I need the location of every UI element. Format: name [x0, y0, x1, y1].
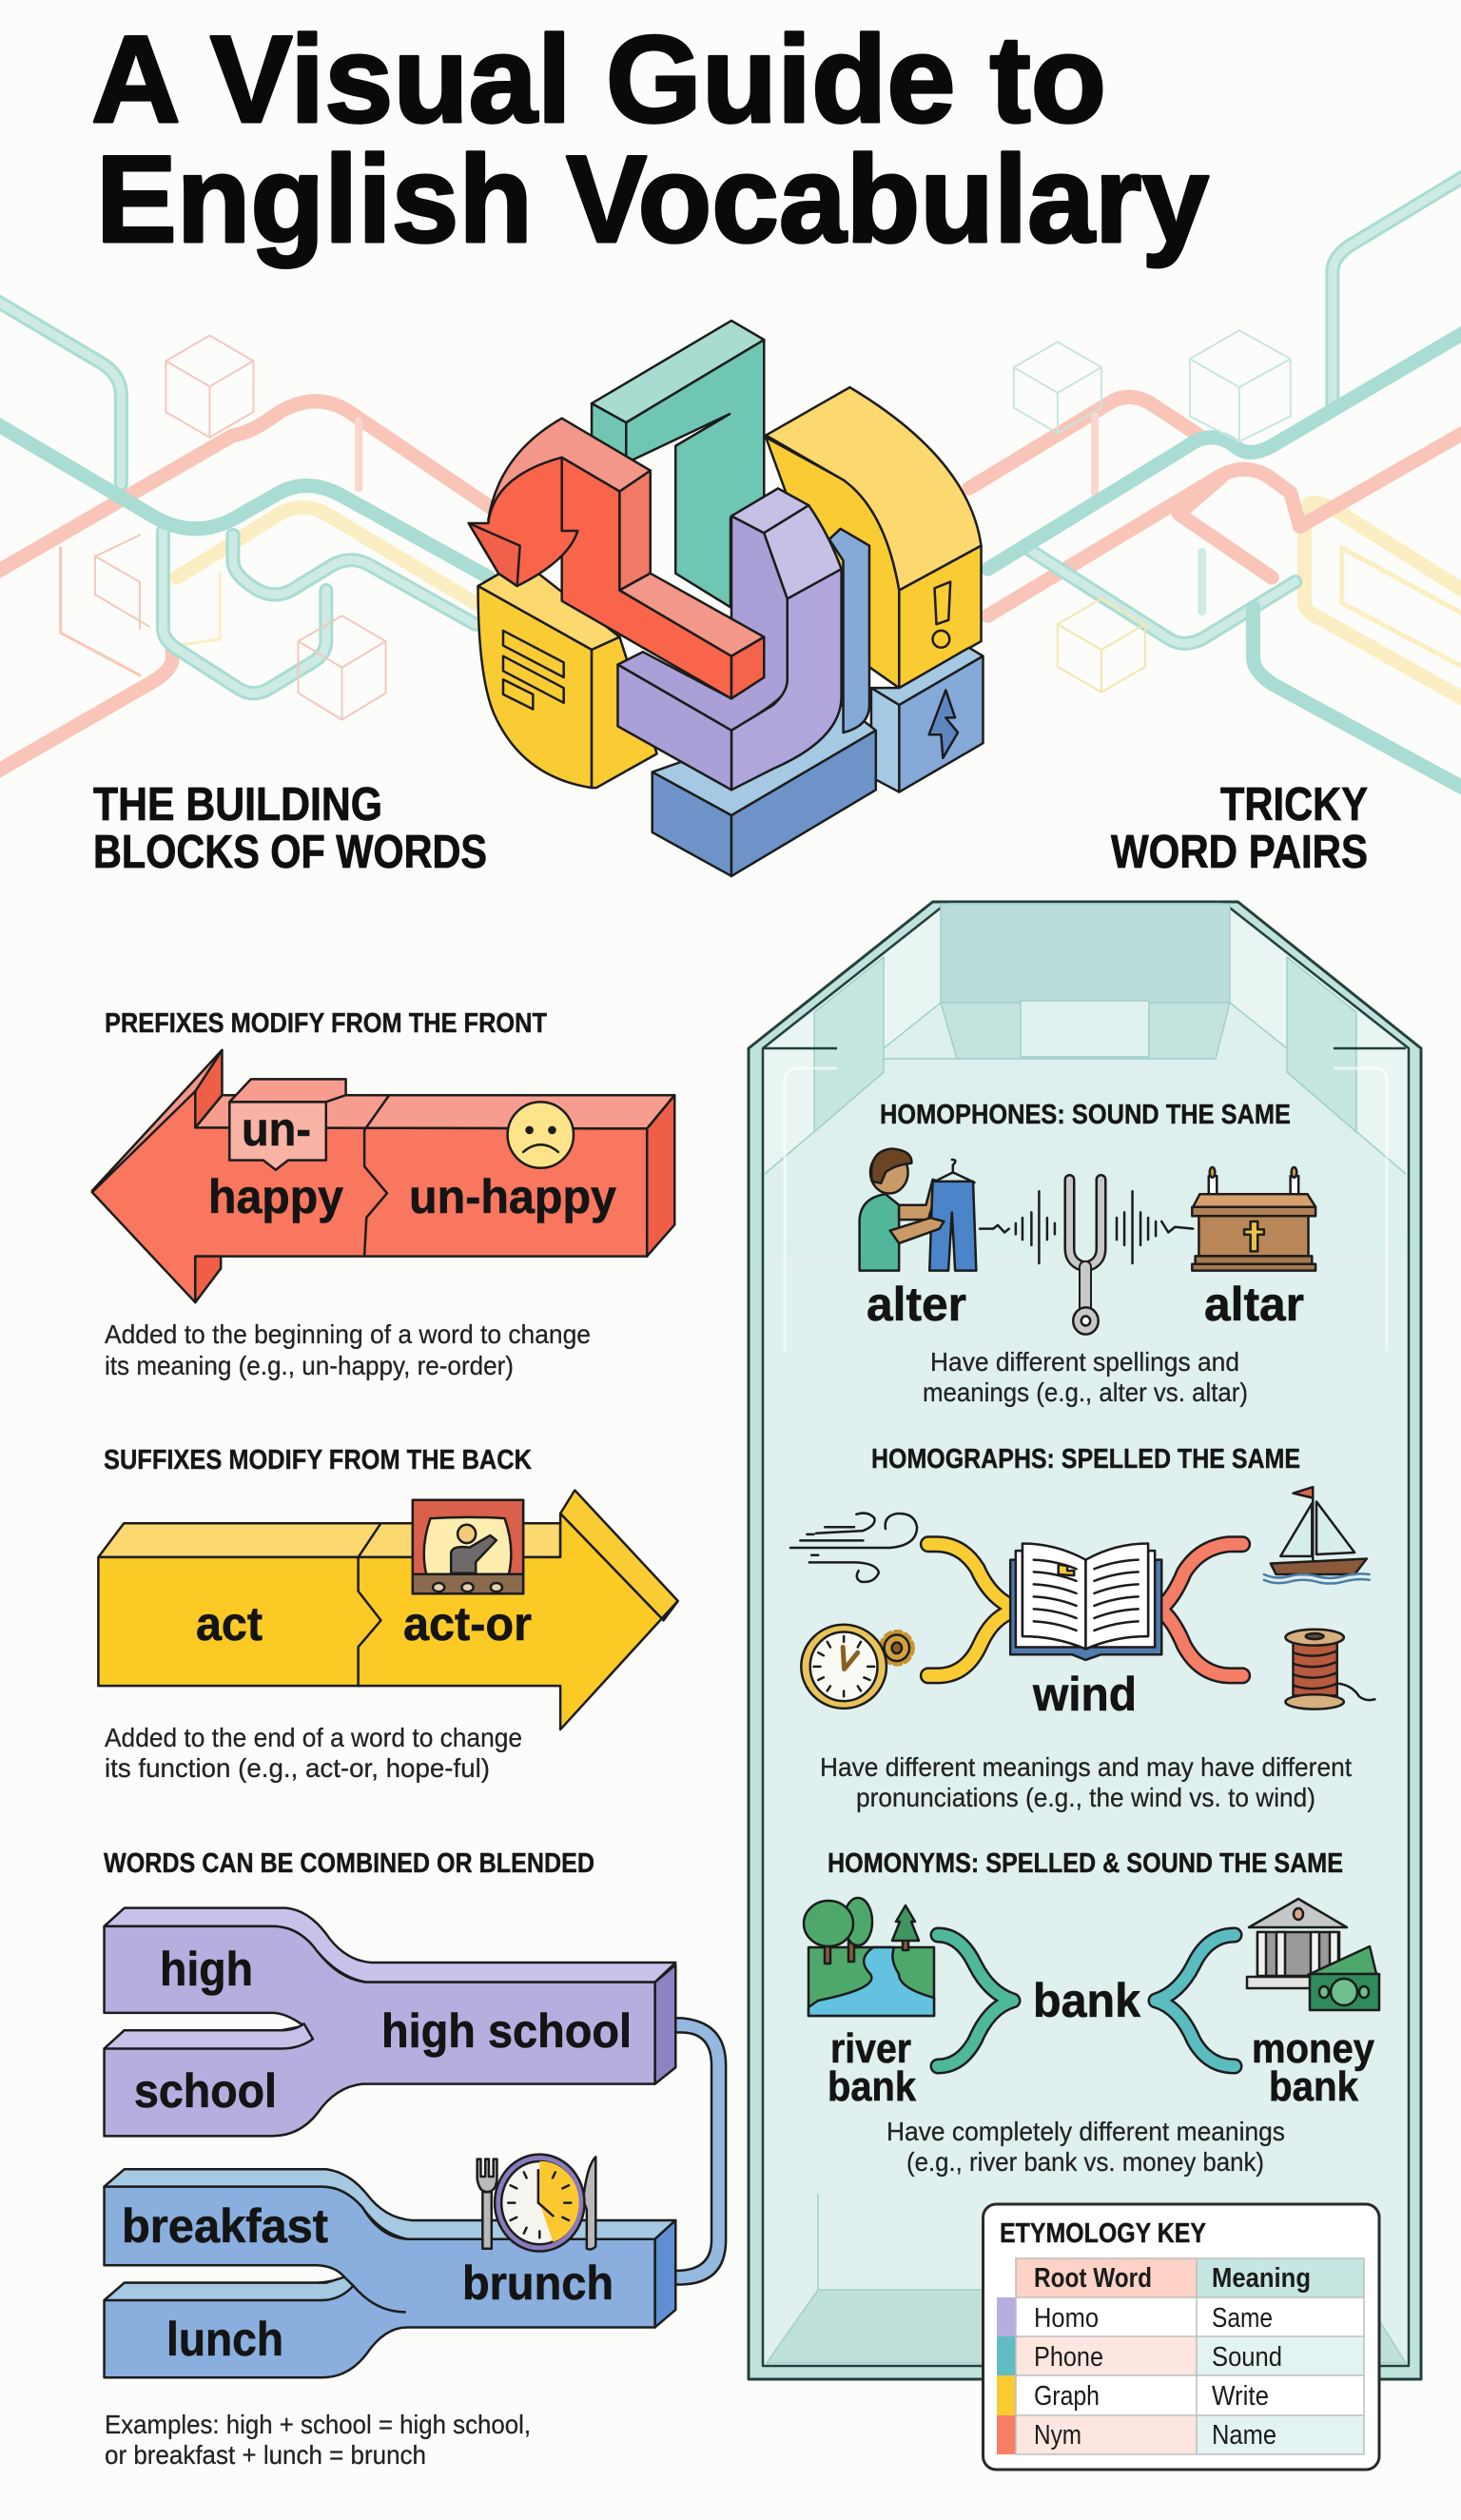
homonyms description: Have completely different meanings — [886, 2117, 1285, 2146]
homophones heading: HOMOPHONES: SOUND THE SAME — [880, 1100, 1291, 1130]
homophones description: meanings (e.g., alter vs. altar) — [923, 1377, 1248, 1407]
compound and blend labels: brunch — [462, 2256, 614, 2310]
prefix description: Added to the beginning of a word to change — [105, 1319, 591, 1349]
suffix arrow labels — [196, 1597, 532, 1651]
homonyms words — [828, 1974, 1374, 2110]
icon: tuning fork — [1069, 1180, 1101, 1335]
red arrow block — [469, 419, 764, 698]
title: A Visual Guide to — [91, 10, 1106, 148]
homophones description: Have different spellings and — [930, 1347, 1239, 1377]
compound and blend labels: school — [134, 2064, 277, 2118]
teal arch block — [592, 321, 764, 607]
suffix arrow labels: act — [196, 1597, 263, 1651]
prefix arrow labels: un-happy — [409, 1170, 616, 1223]
suffix arrow: yellow — [98, 1491, 678, 1729]
suffix description: its function (e.g., act-or, hope-ful) — [105, 1753, 490, 1783]
homographs word: wind — [1032, 1668, 1137, 1721]
table: root words and meanings: Graph — [1034, 2381, 1100, 2412]
compound and blend labels — [122, 1943, 632, 2366]
prefix arrow labels — [208, 1103, 616, 1223]
table: root words and meanings: Root Word — [1034, 2263, 1152, 2294]
blue block with lightning icon — [871, 648, 983, 792]
table: root words and meanings — [997, 2258, 1364, 2454]
table: root words and meanings: Meaning — [1212, 2263, 1311, 2294]
icon: thread spool — [1285, 1630, 1374, 1709]
icon: wind — [790, 1514, 917, 1582]
icon: bank building with money — [1247, 1899, 1379, 2010]
prefix arrow labels: un- — [242, 1103, 311, 1156]
compound and blend labels: lunch — [166, 2313, 283, 2366]
central isometric word blocks illustration — [469, 321, 983, 876]
homonyms description: (e.g., river bank vs. money bank) — [906, 2147, 1264, 2177]
yellow arch block with exclamation icon — [766, 387, 982, 688]
icon: open book — [1010, 1543, 1161, 1660]
homonyms words: bank — [1269, 2063, 1358, 2110]
compounds heading: WORDS CAN BE COMBINED OR BLENDED — [104, 1848, 594, 1879]
connector pipe — [664, 2018, 726, 2284]
prefix description: its meaning (e.g., un-happy, re-order) — [105, 1351, 514, 1380]
section heading: tricky word pairs: TRICKY — [1220, 779, 1368, 830]
homographs description: pronunciations (e.g., the wind vs. to wind) — [856, 1783, 1315, 1812]
homographs diagram — [790, 1487, 1374, 1709]
icon: sad face — [508, 1102, 574, 1168]
red connectors — [1164, 1544, 1242, 1675]
homographs description — [820, 1752, 1352, 1812]
homonyms words: bank — [1033, 1974, 1140, 2027]
homonyms words: money — [1252, 2025, 1374, 2072]
compounds description: or breakfast + lunch = brunch — [105, 2440, 426, 2470]
suffix description: Added to the end of a word to change — [105, 1723, 522, 1752]
homophones words: altar — [1204, 1278, 1304, 1331]
homonyms description — [886, 2117, 1285, 2177]
icon: clock plate with cutlery — [477, 2155, 595, 2252]
icon: river landscape — [804, 1898, 934, 2016]
prefix arrow: red — [92, 1050, 674, 1302]
blue blend shape — [105, 2169, 675, 2377]
icon: altar — [1192, 1167, 1315, 1271]
table: root words and meanings: Write — [1212, 2381, 1269, 2412]
suffixes heading: SUFFIXES MODIFY FROM THE BACK — [104, 1445, 532, 1475]
purple J block — [617, 488, 842, 790]
suffix description — [105, 1723, 522, 1783]
glass floor — [767, 2194, 1406, 2363]
homonyms heading: HOMONYMS: SPELLED & SOUND THE SAME — [828, 1848, 1343, 1879]
table: root words and meanings: Name — [1212, 2420, 1276, 2451]
icon: pocket watch with gear — [801, 1625, 912, 1709]
compounds description — [105, 2410, 531, 2470]
homonyms diagram — [804, 1898, 1379, 2066]
compounds description: Examples: high + school = high school, — [105, 2410, 531, 2439]
homonyms words: river — [830, 2025, 911, 2072]
glass back wall and flap — [765, 904, 1406, 1174]
un- tag box — [229, 1079, 346, 1170]
section heading: building blocks: BLOCKS OF WORDS — [93, 827, 487, 878]
icon: theatre stage — [413, 1500, 523, 1593]
table: root words and meanings: Sound — [1212, 2342, 1282, 2373]
homophones icons — [860, 1148, 1315, 1335]
prefixes heading: PREFIXES MODIFY FROM THE FRONT — [105, 1008, 547, 1039]
prefix arrow labels: happy — [208, 1170, 343, 1223]
purple compound shape — [105, 1908, 675, 2136]
icon: sound waves — [980, 1191, 1193, 1263]
icon: person altering jeans — [860, 1148, 976, 1271]
suffix arrow labels: act-or — [403, 1597, 532, 1651]
right connector brace — [1156, 1935, 1235, 2066]
table: root words and meanings: Phone — [1034, 2342, 1103, 2373]
left connector brace — [938, 1935, 1013, 2066]
section heading: building blocks — [93, 779, 487, 878]
table: root words and meanings: Same — [1212, 2303, 1273, 2334]
card heading: ETYMOLOGY KEY — [1000, 2218, 1206, 2249]
title: English Vocabulary — [96, 129, 1209, 268]
title — [91, 10, 1209, 268]
table: root words and meanings: Nym — [1034, 2420, 1081, 2451]
homographs heading: HOMOGRAPHS: SPELLED THE SAME — [871, 1444, 1300, 1475]
compound and blend labels: high — [160, 1943, 253, 1996]
compound and blend diagrams — [105, 1908, 726, 2377]
prefix description — [105, 1319, 591, 1380]
homophones words: alter — [867, 1278, 966, 1331]
homophones description — [923, 1347, 1248, 1407]
compound and blend labels: high school — [381, 2004, 632, 2058]
section heading: tricky word pairs: WORD PAIRS — [1111, 827, 1368, 878]
section heading: building blocks: THE BUILDING — [93, 779, 382, 830]
yellow document block — [478, 560, 657, 788]
blue base block — [653, 529, 876, 876]
homophones words — [867, 1278, 1304, 1331]
panel: glass box for tricky word pairs — [749, 902, 1421, 2379]
icon: sailboat — [1264, 1487, 1370, 1584]
homographs description: Have different meanings and may have different — [820, 1752, 1352, 1782]
compound and blend labels: breakfast — [122, 2199, 328, 2253]
background network lines — [0, 177, 1461, 788]
table: root words and meanings: Homo — [1034, 2303, 1099, 2334]
yellow connectors — [928, 1544, 1009, 1675]
homonyms words: bank — [828, 2063, 916, 2110]
etymology key card — [984, 2204, 1379, 2470]
section heading: tricky word pairs — [1111, 779, 1368, 878]
